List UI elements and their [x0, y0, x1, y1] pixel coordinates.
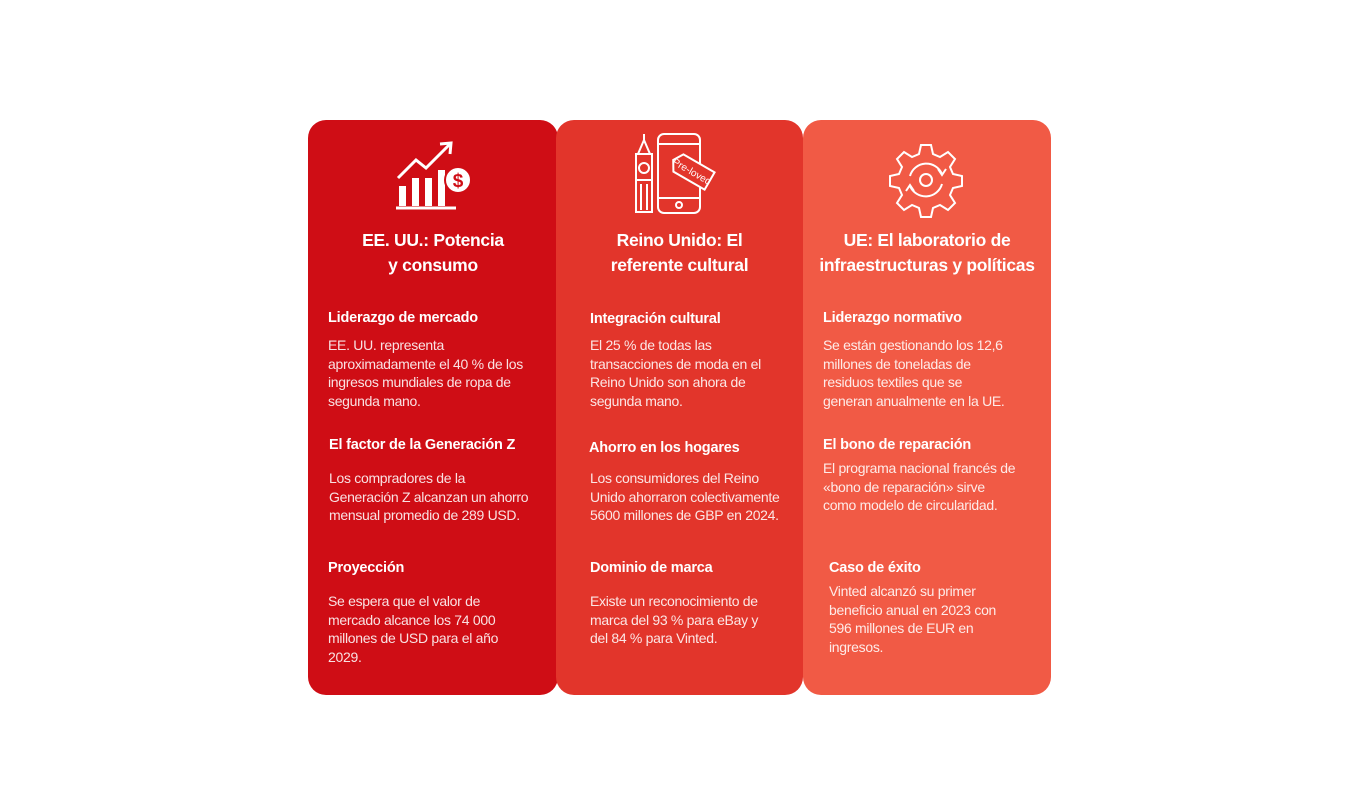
subheading: El factor de la Generación Z: [329, 437, 515, 453]
icon: chart with dollar: $: [453, 171, 464, 192]
body text: [823, 337, 1005, 409]
body text: beneficio anual en 2023 con: [829, 602, 996, 618]
body text: mensual promedio de 289 USD.: [329, 507, 520, 523]
body text: transacciones de moda en el: [590, 356, 761, 372]
body text: marca del 93 % para eBay y: [590, 612, 758, 628]
body text: generan anualmente en la UE.: [823, 393, 1005, 409]
heading: Reino Unido: El: [617, 230, 742, 250]
body text: Los compradores de la: [329, 470, 465, 486]
body text: [329, 470, 528, 523]
body text: millones de toneladas de: [823, 356, 971, 372]
body text: [590, 470, 780, 523]
body text: ingresos.: [829, 639, 883, 655]
body text: «bono de reparación» sirve: [823, 479, 985, 495]
body text: como modelo de circularidad.: [823, 497, 997, 513]
subheading: El bono de reparación: [823, 437, 971, 453]
subheading: Caso de éxito: [829, 560, 921, 576]
body text: 2029.: [328, 649, 362, 665]
panel: USA: [308, 120, 558, 695]
body text: millones de USD para el año: [328, 630, 498, 646]
heading: EE. UU.: Potencia: [362, 230, 504, 250]
body text: Existe un reconocimiento de: [590, 593, 758, 609]
heading: [611, 230, 748, 274]
body text: del 84 % para Vinted.: [590, 630, 717, 646]
body text: 596 millones de EUR en: [829, 620, 973, 636]
subheading: Liderazgo normativo: [823, 310, 962, 326]
body text: [823, 460, 1015, 513]
subheading: Dominio de marca: [590, 560, 712, 576]
body text: [328, 337, 523, 409]
heading: UE: El laboratorio de: [844, 230, 1010, 250]
body text: Generación Z alcanzan un ahorro: [329, 489, 528, 505]
heading: y consumo: [388, 254, 478, 274]
body text: residuos textiles que se: [823, 374, 962, 390]
heading: infraestructuras y políticas: [819, 254, 1035, 274]
body text: segunda mano.: [328, 393, 421, 409]
body text: Se espera que el valor de: [328, 593, 480, 609]
body text: Vinted alcanzó su primer: [829, 583, 976, 599]
body text: Se están gestionando los 12,6: [823, 337, 1003, 353]
icon: chart with dollar: [396, 141, 470, 210]
icon: gear with cycle arrows: [889, 144, 963, 218]
panel: UK: [556, 120, 803, 695]
subheading: Ahorro en los hogares: [589, 440, 740, 456]
body text: El programa nacional francés de: [823, 460, 1015, 476]
subheading: Proyección: [328, 560, 404, 576]
body text: segunda mano.: [590, 393, 683, 409]
body text: Reino Unido son ahora de: [590, 374, 745, 390]
body text: [590, 593, 758, 646]
subheading: Liderazgo de mercado: [328, 310, 478, 326]
body text: Unido ahorraron colectivamente: [590, 489, 779, 505]
heading: referente cultural: [611, 254, 748, 274]
body text: [590, 337, 761, 409]
body text: 5600 millones de GBP en 2024.: [590, 507, 779, 523]
body text: ingresos mundiales de ropa de: [328, 374, 511, 390]
body text: [829, 583, 996, 655]
body text: mercado alcance los 74 000: [328, 612, 495, 628]
body text: [328, 593, 498, 665]
body text: EE. UU. representa: [328, 337, 444, 353]
subheading: Integración cultural: [590, 311, 721, 327]
body text: El 25 % de todas las: [590, 337, 712, 353]
heading: [819, 230, 1035, 274]
panel: EU: [803, 120, 1051, 695]
icon: Big Ben and phone: [635, 133, 716, 214]
body text: Los consumidores del Reino: [590, 470, 759, 486]
icon: Big Ben and phone: Pre-loved: [670, 157, 713, 188]
heading: [362, 230, 504, 274]
body text: aproximadamente el 40 % de los: [328, 356, 523, 372]
